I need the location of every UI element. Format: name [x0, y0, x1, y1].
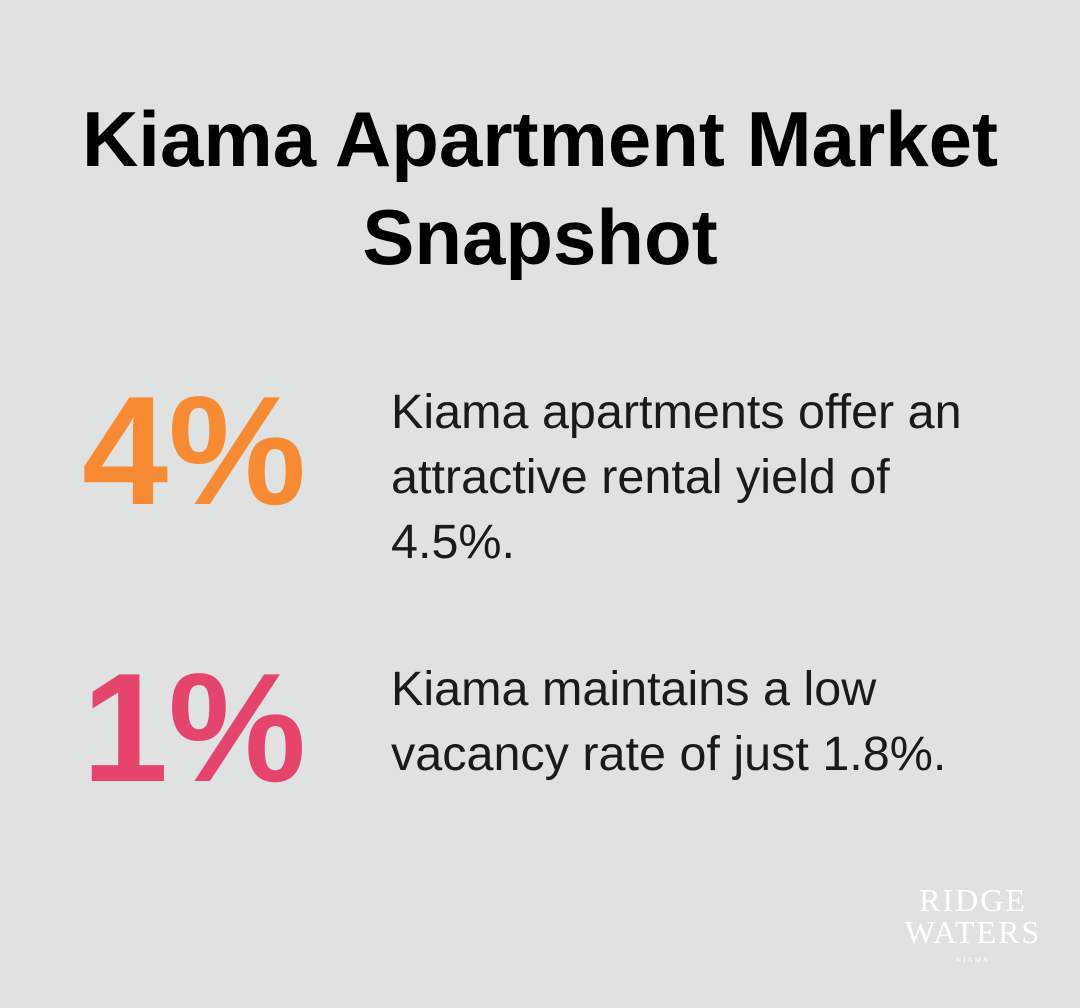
text: vacancy: Kiama maintains a low [391, 662, 876, 716]
title: Snapshot [362, 193, 718, 281]
text: rental yield: Kiama apartments offer an [391, 385, 962, 439]
text: vacancy: vacancy rate of just 1.8%. [391, 727, 946, 781]
text: rental yield: 4.5%. [391, 515, 515, 569]
text: rental yield: attractive rental yield of [391, 450, 890, 504]
logo [904, 882, 1041, 964]
logo: WATERS [905, 914, 1041, 950]
stat: 4%: 4% [82, 364, 306, 537]
text: rental yield [391, 385, 962, 569]
logo: RIDGE [919, 882, 1027, 918]
stat: 1%: 1% [82, 641, 306, 814]
logo: KIAMA [956, 956, 990, 964]
text: vacancy [391, 662, 946, 781]
title [82, 95, 998, 281]
title: Kiama Apartment Market [82, 95, 998, 183]
